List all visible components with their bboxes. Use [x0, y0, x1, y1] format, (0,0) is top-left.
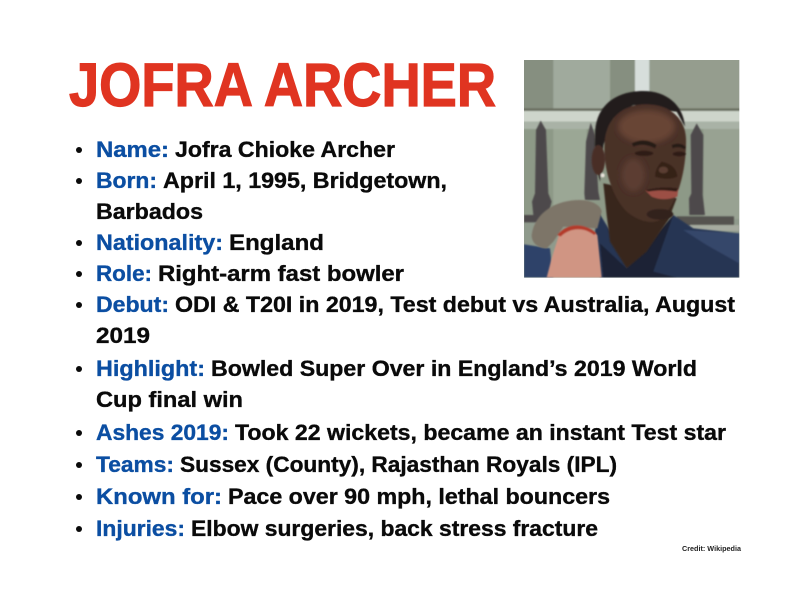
fence railing: [524, 121, 739, 231]
fact: born: Born:: [96, 168, 157, 193]
neck: [603, 183, 677, 268]
fact: name: Name:: [96, 137, 169, 162]
fact: born: [96, 168, 447, 224]
fact: highlight: [96, 356, 697, 412]
photo: Jofra Archer portrait: [520, 55, 747, 282]
fact: ashes: Took 22 wickets, became an instant Test star: [235, 420, 726, 445]
fact: teams: Sussex (County), Rajasthan Royals (IPL): [180, 452, 617, 477]
arm and sleeve: [532, 200, 602, 278]
fact: ashes: Ashes 2019:: [96, 420, 229, 445]
fact list: [76, 137, 736, 541]
fact: name: [96, 137, 395, 162]
shirt: [524, 212, 739, 278]
fact: known for: Known for:: [96, 484, 222, 509]
head: [592, 91, 686, 222]
fact: highlight: Cup final win: [96, 387, 243, 412]
title: JOFRA ARCHER: [69, 51, 496, 119]
fact: debut: [96, 292, 736, 348]
fact: nationality: [96, 230, 324, 255]
fact: teams: Teams:: [96, 452, 174, 477]
fact: injuries: Injuries:: [96, 516, 185, 541]
fact: nationality: England: [229, 230, 324, 255]
fact: role: Right-arm fast bowler: [158, 261, 404, 286]
fact: highlight: Bowled Super Over in England’s 2019 World: [211, 356, 697, 381]
fact: born: April 1, 1995, Bridgetown,: [163, 168, 447, 193]
fact: debut: ODI & T20I in 2019, Test debut vs Australia, August: [175, 292, 736, 317]
fact: highlight: Highlight:: [96, 356, 205, 381]
fact: name: Jofra Chioke Archer: [175, 137, 395, 162]
bullet points: [76, 147, 82, 532]
credit: Credit: Wikipedia: [682, 546, 741, 553]
fact: born: Barbados: [96, 199, 203, 224]
fact: injuries: Elbow surgeries, back stress fracture: [191, 516, 598, 541]
fact: debut: 2019: [96, 323, 150, 348]
fact: debut: Debut:: [96, 292, 169, 317]
fact: known for: Pace over 90 mph, lethal bouncers: [228, 484, 610, 509]
fact: nationality: Nationality:: [96, 230, 223, 255]
fact: role: Role:: [96, 261, 152, 286]
